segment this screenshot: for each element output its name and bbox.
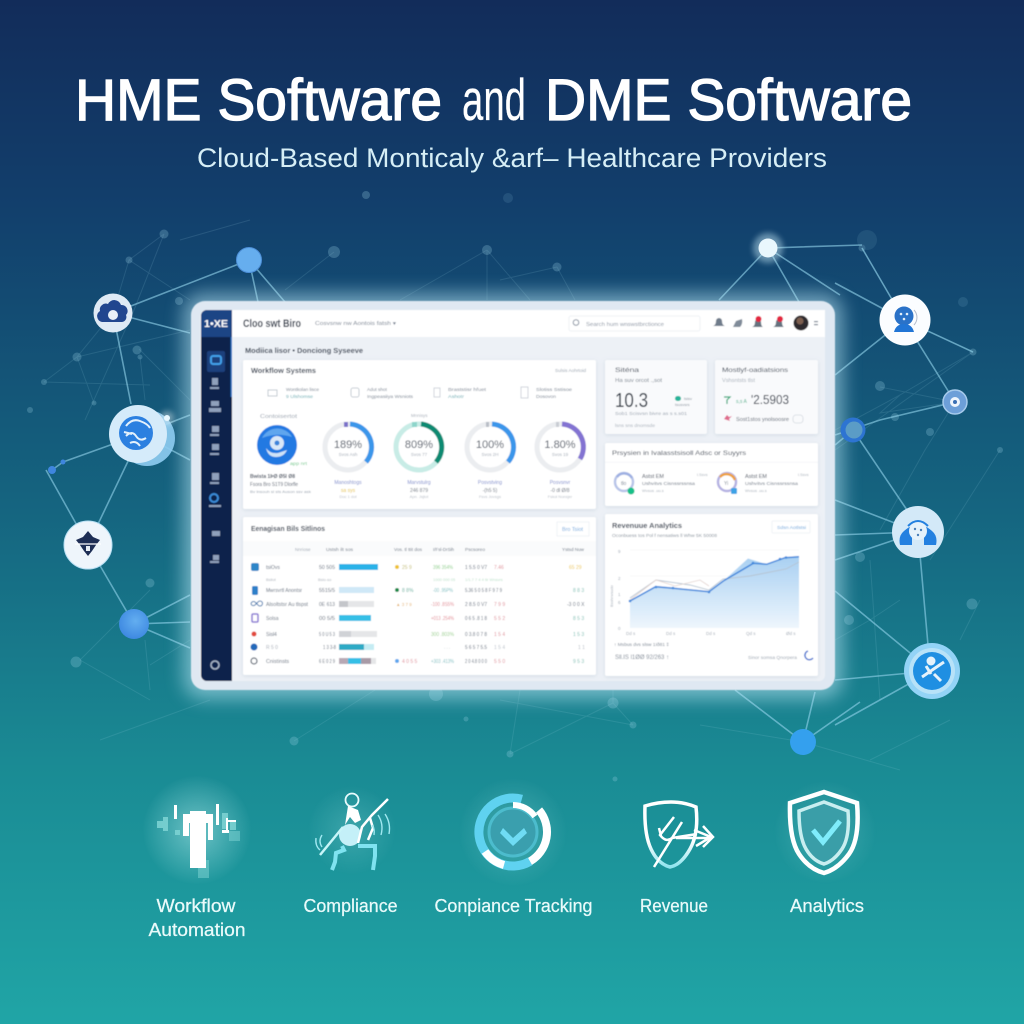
line chart: 0 [618,626,621,631]
top bar: Cosvsnw nw Aontois fatsh ▾ [315,321,396,327]
table rows: 1 3 3-8 [323,645,336,651]
table rows: 25 9 [402,565,412,571]
subtitle: Cloud-Based Monticaly &arf– Healthcare Providers [197,143,827,173]
table rows: Bsliot [266,577,277,582]
node: tools disc [904,643,960,699]
panel: monthly notifications card [715,360,818,434]
workflow tabs row: Adut shot [367,387,388,393]
node: white top dot [753,233,783,263]
table rows: 7 9 9 [494,602,505,608]
ring chart 3: Posvstving [478,480,502,486]
ring chart 1 [325,422,372,499]
ring chart 1: sa sys [341,488,356,494]
table rows: +303 .413% [431,659,454,665]
ring chart 4: 1.80% [544,439,576,451]
panel: sites stat card: tsisv [684,396,692,401]
panel: monthly notifications card: Vshsntsts tlst [722,378,756,384]
ring chart 2: 809% [405,439,433,451]
line chart [609,549,799,636]
dashboard glow [183,293,843,699]
table rows: 4 0 5 5 [402,659,418,665]
table rows: 0 6 5 .8 1 8 [465,616,487,622]
table rows [250,563,585,665]
table rows: 1 5 4 [494,632,505,638]
table rows: Mwrsvrtl Anontsr [266,588,302,594]
table rows: 5.36 5 0 5 8 F 9 7 9 [465,588,502,594]
table header: Pscsoreo [465,547,486,552]
panel: sites stat card: Sob1 Scisvsn bivre as s s.s01 [615,411,688,416]
table header: Vos. tl ttit dos [394,547,423,552]
panel: monthly notifications card: s,s A [736,399,748,405]
panel: sites stat card: Ha suv orcot .,sot [615,378,663,384]
label: analytics: Analytics [790,895,864,916]
ring chart 2: Marvstulrg [407,480,431,486]
title: and [462,68,526,133]
panel: sites stat card: 10.3 [615,390,648,412]
title [75,68,912,133]
panel: monthly notifications card: Mostlyf-oadiatsions [722,367,789,374]
feature: revenue [640,802,713,916]
panel: workflow systems: Workflow Systems [251,366,316,375]
label: compliance tracking: Conpiance Tracking [434,895,592,916]
compliance blue disc: Bwista 1ÞØ Ø5I Ø8 [250,474,295,480]
table rows: 2 8.5 0 V7 [465,602,487,608]
panel: physician card: Yi [724,481,728,487]
ring chart 3: -(h5 5) [483,488,498,494]
table rows: 50 505 [319,565,335,571]
node: small blue dots left [48,460,66,474]
panel: workflow systems [243,360,596,509]
top bar [232,310,825,337]
icon: analytics shield [773,780,877,884]
table rows: 5 6 5 7 5.5 [465,645,487,651]
table rows: 5 5 2 [494,616,505,622]
table rows: 7.46 [494,565,504,571]
table rows: 0E 613 [319,602,335,608]
table rows: 8 5 3 [573,616,584,622]
table rows: 1 5 3 [573,632,584,638]
feature: workflow automation [142,775,252,940]
ring chart 4: Posvsnvr [550,480,571,486]
ring chart 2 [396,413,442,499]
table rows: 00 5/5 [319,616,335,622]
table rows: -100 .8S5% [431,602,454,608]
panel: physician card: Ushvitvs Cisnssrssnsa [745,481,798,487]
panel: monthly notifications card: '2.5903 [751,392,789,407]
workflow tabs row: Dosovon [536,394,556,400]
line chart: Qd s [746,631,756,636]
compliance blue disc: Contoisertot [260,414,298,420]
panel: physician card: Wvsus .uu.s [745,488,767,493]
ring chart 3 [467,422,514,499]
workflow tabs row: Wontkolan lisce [286,387,319,393]
panel: physician card: Wvsus .uu.s [642,488,664,493]
ring chart 2: 246 879 [410,488,428,494]
table rows: 1 5 4 [494,645,505,651]
ring chart 2: Apn. Jsjtot [410,494,429,499]
compliance blue disc: app nrt [290,461,308,466]
table rows: Alsoltstsr Au tlspst [266,602,309,608]
feature: compliance tracking [434,777,592,916]
table rows: ▲ 3 7 9 [396,602,412,607]
line chart: 6 [618,600,621,605]
panel: physician card: l.Ssvs [798,472,809,477]
workflow tabs row: 9 Ulshomse [286,394,313,400]
icon: revenue shield [645,802,713,867]
panel: physician card: Astst EM [745,474,767,480]
table rows: -00 .95P% [433,588,453,594]
panel: sites stat card: tsusvsrs [675,402,690,407]
ring chart 4: -0 dl Ø/8 [550,488,570,494]
compliance blue disc [250,414,311,494]
panel: revenue analytics: Sll.IS l1ØØ 92/263 ↑ [615,655,669,661]
line chart: Bsshnvsudo [609,584,614,607]
panel: sites stat card: Siténa [615,367,639,374]
table rows: - - - [444,645,451,650]
ring chart 4: Svos 19 [552,452,569,457]
table header: Ystsd Nuw [562,547,585,552]
table rows: 8 8 3 [573,588,584,594]
table rows: Cnistinsts [266,659,290,665]
ring chart 4 [537,422,583,499]
panel: monthly notifications card: Sost1stos ynolsoosre [736,417,789,423]
node: blue ball left [119,609,149,639]
network: faint background mesh [44,220,1000,770]
table rows: +013 .254% [431,616,454,622]
label: revenue: Revenue [640,895,708,916]
label: workflow automation: Automation [148,919,246,940]
table rows: Sisl4 [266,632,277,638]
label: workflow automation [148,895,246,940]
table rows: R 5 0 [266,645,278,651]
panel: revenue analytics [605,514,818,676]
sidebar: 1•XE [204,319,228,330]
workflow tabs row: Slotiss Sstisoe [536,387,572,393]
network: connector lines [46,245,973,742]
node: head network [880,294,930,346]
table rows: 1 1 [578,645,585,651]
title: DME Software [545,68,912,133]
panel: revenue analytics: Sinor somsa Qnorpera [748,655,798,660]
workflow tabs row: Braststisr hfuet [448,387,487,393]
workflow tabs row [268,387,572,400]
table rows: Bsio-so [318,577,332,582]
ring chart 1: Svos Ash [339,452,358,457]
node: blue ball top [236,248,262,272]
network: faint background dots [27,191,1003,782]
table rows: 396 354% [433,565,453,571]
panel: workflow systems: Sulsis Aohrtoid [555,368,587,373]
node: small badge [943,390,967,414]
panel: physician card [605,443,818,506]
table rows: 8 8% [402,588,414,594]
table rows: -3 0 0 X [567,602,585,608]
node: dark diamond [64,521,112,569]
ring chart 1: 189% [334,439,362,451]
panel: revenue analytics: Revenuue Analytics [612,523,682,530]
icon: compliance figure [307,785,397,875]
table rows: 1000 000 05 [433,577,456,582]
table rows: Solsa [266,616,279,622]
line chart: Dd s [666,631,676,636]
feature: compliance [304,785,398,916]
sidebar [201,310,232,681]
line chart: Ød s [786,631,796,636]
table rows: 2 0 4.8 0 0 0 [465,659,487,665]
node: large brain disc [109,405,175,466]
ring chart 3: 100% [476,439,504,451]
table header: I/Fsl-DrSih [433,547,454,552]
panel: revenue analytics: Oconbuess tos Pol f nensatiws ll Whw 5K 50008 [612,533,717,539]
panel: sites stat card: lsns sns dnomsde [615,423,656,428]
panel: physician card: Prsysien in Ivalasstsisoll Adsc or Suyyrs [612,450,747,457]
panel: billing table [243,517,596,675]
top bar: Search hum wnswstbrctionce [586,322,664,328]
panel: physician card: tlo [621,481,626,487]
ring chart 3: Svos 2H [481,452,499,457]
workflow tabs row: Ingpeasiiya Wsniots [367,394,414,400]
line chart: 1 [618,592,621,597]
ring chart 1: Manoshtogs [334,480,362,486]
page heading: Modiica lisor • Donciong Syseeve [245,346,363,355]
panel: revenue analytics: Sdsn Aotlstsi [777,525,806,531]
panel: sites stat card [605,360,707,434]
panel: billing table: Eenagisan Bils Sitlinos [251,524,325,533]
feature: analytics [773,780,877,916]
ring chart 2: Svos 77 [411,452,428,457]
title: HME Software [75,68,442,133]
table rows: 9 5 3 [573,659,584,665]
panel: revenue analytics: ↑ Msbus dvs slsw 1Ið81 ‡ [614,641,670,647]
table rows: 300 .803% [431,632,455,638]
table rows: 1/1.7 7 4 4 tlr Wnsvrs [465,577,503,582]
node: cloud person [94,294,132,332]
table header [295,547,585,552]
panel: billing table: Bro Tsiot [562,527,584,533]
ring chart 4: Fskol Nonsjer [548,494,573,499]
table header: Nnriose [295,547,311,552]
line chart: Dd s [706,631,716,636]
workflow tabs row: Ashotr [448,394,464,400]
node: blue ball bottom [790,729,816,755]
table header: Ustsh ilt sos [326,547,354,552]
table rows: 5 5 0 [494,659,505,665]
table rows: 65 29 [569,565,582,571]
ring chart 1: Doc 1 dot [339,494,357,499]
label: workflow automation: Workflow [156,895,236,916]
panel: physician card: l.Ssvs [697,472,708,477]
icon: tracking ring [458,777,568,887]
panel: physician card: Ushvitvs Cisnssrssnsa [642,481,695,487]
compliance blue disc: Fsora Bro S1T9 Dlorfle [250,482,298,488]
ring chart 2: Mnnisys [411,413,428,418]
node: blue ball right [840,418,866,442]
top bar: Cloo swt Biro [243,318,301,330]
line chart: 9 [618,549,621,554]
dashboard window [191,301,835,690]
line chart: 2 [618,576,621,581]
ring chart 3: Fsvs Jovsgs [479,494,501,499]
compliance blue disc: Bv lnsouh sl sts Auson ssv ask [250,489,311,494]
table rows: 5515/5 [319,588,335,594]
table rows: 0 3.8 0 7 8 [465,632,487,638]
table rows: 5 0 U 5 3 [319,632,335,638]
table rows: 6 E 0 2 9 [319,659,335,665]
node: helmet person [892,506,944,558]
table rows: tsiOvs [266,565,280,571]
panel: physician card: Astst EM [642,474,664,480]
table rows: 1 5.5 0 V7 [465,565,487,571]
line chart: Dd s [626,631,636,636]
icon: workflow [142,775,252,885]
label: compliance: Compliance [304,895,398,916]
